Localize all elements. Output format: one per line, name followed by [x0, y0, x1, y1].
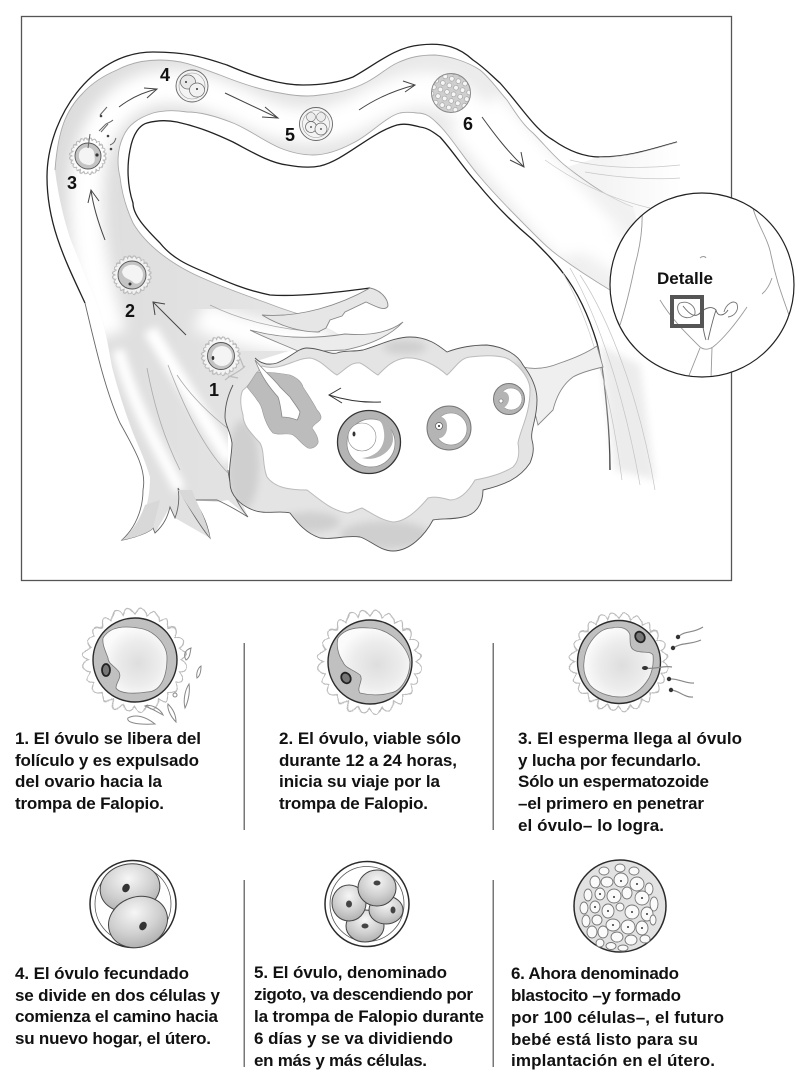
step numbers on the diagram: 4	[160, 65, 170, 85]
divider	[492, 880, 494, 1067]
divider	[244, 880, 245, 1067]
fimbria streak lines	[147, 305, 320, 473]
step 4 illustration	[90, 859, 176, 956]
ligament streaks	[563, 268, 655, 490]
step 3 illustration	[570, 613, 703, 711]
ovum stage 4 in tube	[176, 70, 208, 102]
arrow: 4 to 5	[225, 93, 278, 118]
step 6 text: blastocito –y formado	[511, 986, 681, 1005]
lower fimbriae silhouette	[85, 303, 248, 540]
upper fimbria	[262, 288, 388, 332]
medium follicle	[427, 406, 471, 450]
step 6 text: por 100 células–, el futuro	[511, 1008, 724, 1027]
divider	[244, 643, 245, 830]
step 4 text: su nuevo hogar, el útero.	[15, 1029, 211, 1048]
step 5 text: 6 días y se va dividiendo	[254, 1029, 453, 1048]
arrows along the tube	[88, 81, 524, 335]
arrow: 6 onward	[482, 117, 524, 167]
step 3 text: Sólo un espermatozoide	[518, 772, 709, 791]
ovum stage 5 in tube	[300, 108, 332, 140]
detail marker square	[672, 297, 702, 326]
step numbers on the diagram: 1	[209, 380, 219, 400]
step 2 text: inicia su viaje por la	[279, 772, 441, 791]
ovarian ligament	[523, 346, 603, 425]
ovum stage 1 in tube	[202, 337, 245, 380]
step 4 text: se divide en dos células y	[15, 986, 221, 1005]
divider	[492, 643, 494, 830]
ovary outer shape	[225, 337, 537, 551]
step numbers on the diagram	[67, 65, 473, 400]
step 6 text: implantación en el útero.	[511, 1051, 715, 1070]
arrow: 5 to 6	[359, 81, 415, 110]
step 2 illustration	[319, 611, 421, 713]
arrow: follicle to surface	[329, 388, 381, 403]
panel: main diagram frame	[22, 16, 732, 580]
ovary outline	[225, 337, 537, 551]
ruptured follicle	[247, 372, 321, 448]
large follicle	[338, 410, 400, 474]
step numbers on the diagram: 5	[285, 125, 295, 145]
ovum stage 2 in tube	[113, 256, 151, 294]
inner tube contour	[128, 121, 610, 470]
step 6 text: 6. Ahora denominado	[511, 964, 679, 983]
step 1 text: folículo y es expulsado	[15, 751, 199, 770]
tube end fan toward uterus	[567, 142, 680, 225]
upper lumen edge	[55, 55, 633, 207]
arrow: 3 to 4	[119, 88, 157, 107]
step 5 text: la trompa de Falopio durante	[254, 1007, 484, 1026]
step 1 illustration	[84, 609, 201, 724]
ovary inner white body	[241, 356, 530, 522]
broad ligament	[600, 345, 655, 480]
detail label: Detalle	[657, 269, 713, 288]
step 5 text: 5. El óvulo, denominado	[254, 963, 447, 982]
step 6 text: bebé está listo para su	[511, 1030, 698, 1049]
step numbers on the diagram: 2	[125, 301, 135, 321]
step 4 text: 4. El óvulo fecundado	[15, 964, 189, 983]
second upper fimbria	[250, 322, 403, 352]
step 2 text: trompa de Falopio.	[279, 794, 428, 813]
step 1 text: del ovario hacia la	[15, 772, 163, 791]
step 1 text: 1. El óvulo se libera del	[15, 729, 201, 748]
arrow: 2 to 3	[88, 190, 105, 240]
step 3 text: –el primero en penetrar	[518, 794, 704, 813]
sperm	[645, 627, 703, 697]
step 1 text: trompa de Falopio.	[15, 794, 164, 813]
step numbers on the diagram: 3	[67, 173, 77, 193]
ovary with follicles	[225, 337, 603, 551]
fluid droplets	[128, 648, 201, 724]
fan streak lines	[545, 160, 680, 208]
arrow: 1 to 2	[153, 302, 186, 335]
step 3 text: y lucha por fecundarlo.	[518, 751, 701, 770]
outer tube contour	[47, 44, 677, 303]
fimbriae shading	[122, 490, 210, 540]
uterus and tubes	[660, 300, 747, 378]
step 2 text: 2. El óvulo, viable sólo	[279, 729, 461, 748]
step 6 illustration	[574, 860, 666, 952]
small follicle	[494, 384, 524, 414]
step 2 text: durante 12 a 24 horas,	[279, 751, 457, 770]
step numbers on the diagram: 6	[463, 114, 473, 134]
lower lumen edge	[118, 111, 610, 320]
follicle rupture white cavity	[255, 360, 300, 420]
step 5 illustration	[325, 862, 409, 946]
step 5 text: zigoto, va descendiendo por	[254, 985, 473, 1004]
detail inset circle	[610, 193, 794, 378]
step 3 text: el óvulo– lo logra.	[518, 816, 664, 835]
body contours	[620, 208, 790, 325]
step 3 text: 3. El esperma llega al óvulo	[518, 729, 742, 748]
fallopian tube with fimbriae	[46, 44, 680, 541]
ovum stage 3 with sperm in tube	[70, 107, 116, 174]
step 5 text: en más y más células.	[254, 1051, 427, 1070]
ovary shading	[227, 340, 528, 549]
ovum stage 6 in tube	[432, 74, 470, 112]
step 4 text: comienza el camino hacia	[15, 1007, 219, 1026]
